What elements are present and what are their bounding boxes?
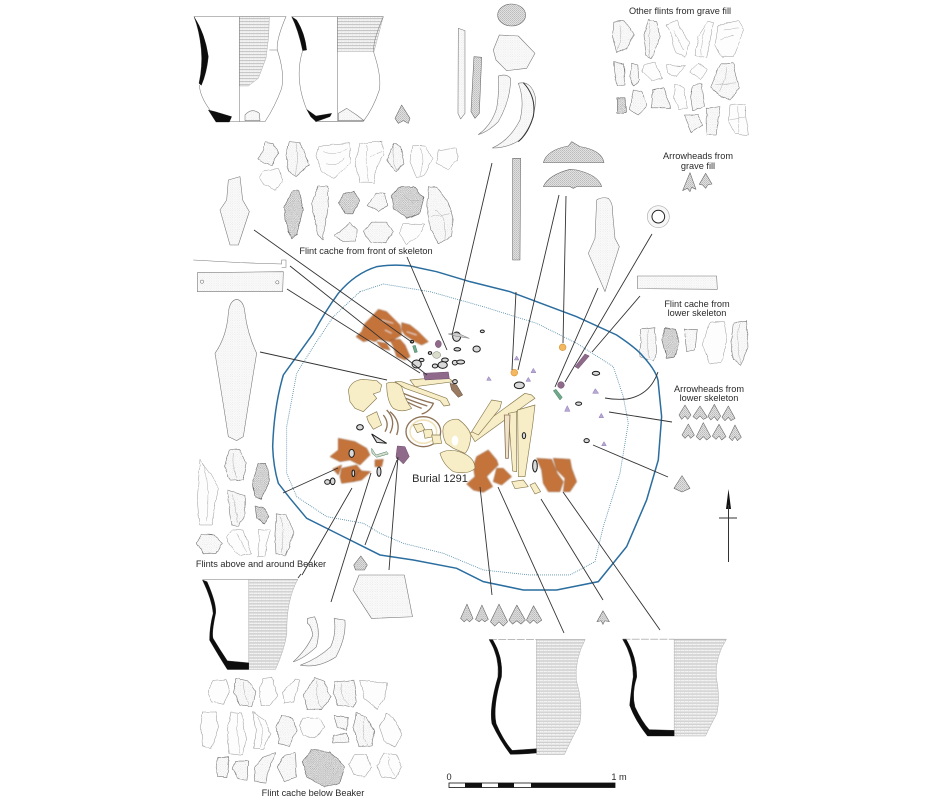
tusks — [478, 75, 536, 148]
other flints from grave fill — [613, 20, 748, 135]
flints above and around Beaker — [197, 449, 294, 557]
lilac arrowheads — [487, 356, 606, 446]
flints, scattered — [325, 330, 600, 485]
knife lower — [543, 169, 602, 188]
beaker 1 — [194, 17, 286, 122]
label: flints above and around Beaker: Flints above and around Beaker — [196, 559, 326, 569]
sherds: left cluster — [330, 438, 383, 483]
green stone pieces — [372, 345, 562, 457]
scale bar: 1 m — [611, 772, 627, 782]
foot bones — [512, 480, 541, 494]
tibia 1 — [518, 405, 535, 477]
stone ball — [498, 4, 526, 26]
pelvis upper — [443, 419, 471, 453]
skull — [348, 379, 382, 412]
arrowhead — [395, 105, 410, 123]
pelvis lower — [440, 450, 475, 473]
flint cache below Beaker — [201, 678, 402, 786]
large dagger — [215, 299, 257, 441]
flint cache from front of skeleton — [257, 142, 457, 244]
arrowhead, lower right — [674, 476, 690, 492]
lower middle beaker — [489, 639, 585, 754]
label: flint cache from front of skeleton: Flint cache from front of skeleton — [299, 246, 433, 256]
upper arm — [395, 382, 450, 406]
top beakers, arrowhead and bone tools — [194, 4, 536, 260]
wrist guard section — [193, 260, 286, 267]
jaw — [367, 412, 382, 429]
label: flint cache below Beaker: Flint cache below Beaker — [262, 788, 364, 798]
purple stone tools — [396, 340, 589, 464]
beaker 2 — [292, 17, 383, 122]
tibia 2 — [508, 412, 517, 472]
label: arrowheads from lower skeleton: lower skeleton — [680, 393, 738, 403]
wrist guard right — [637, 276, 717, 289]
wrist guard — [197, 272, 283, 292]
scale bar — [446, 772, 627, 788]
boar tusks — [293, 617, 345, 666]
long rod — [513, 158, 521, 260]
amber beads — [511, 344, 566, 376]
sherds: right cluster — [537, 458, 577, 492]
grave cut outline — [273, 265, 662, 590]
label: arrowheads from grave fill: Arrowheads from — [663, 151, 733, 161]
small flint above sherd — [354, 556, 367, 570]
pelvis hole — [452, 436, 458, 446]
spine — [413, 423, 442, 444]
sherds: upper cluster — [356, 309, 428, 360]
plano-convex object — [493, 35, 535, 71]
dagger — [588, 198, 619, 292]
ring — [647, 206, 669, 228]
fibula — [504, 415, 510, 458]
label: other flints from grave fill: Other flints from grave fill — [629, 6, 731, 16]
hand bones — [450, 383, 463, 397]
femur 1 — [470, 393, 535, 442]
leader lines — [254, 163, 672, 633]
pottery sherds: Beaker clusters — [330, 309, 577, 492]
skeleton — [348, 377, 541, 494]
forearm — [410, 377, 453, 387]
label: flint cache from lower skeleton: Flint cache from — [664, 299, 730, 309]
left objects: wrist guard, dagger — [193, 260, 286, 441]
sherds: middle cluster — [467, 450, 512, 492]
bone points — [458, 28, 482, 119]
small finds in grave — [325, 330, 606, 485]
flint cache from lower skeleton — [640, 321, 748, 365]
copper and stone objects, upper right — [543, 142, 717, 292]
lower right beaker — [623, 639, 726, 736]
label: flint cache from lower skeleton: lower skeleton — [668, 308, 726, 318]
femur 2 — [472, 400, 502, 435]
arrowheads from grave fill — [683, 173, 712, 192]
ribs and rib cage — [383, 393, 441, 447]
bottom-left beaker — [202, 579, 298, 670]
knife upper — [543, 142, 604, 163]
inner grave line — [287, 284, 628, 575]
arrowheads below burial — [461, 604, 609, 626]
label: arrowheads from lower skeleton: Arrowheads from — [674, 384, 744, 394]
scale bar: 0 — [446, 772, 452, 782]
arrowheads from lower skeleton — [679, 404, 741, 441]
shoulder — [387, 382, 412, 411]
label: Burial 1291: Burial 1291 — [412, 473, 468, 485]
dagger pommel fragment — [220, 177, 249, 245]
decorated sherd — [353, 575, 413, 618]
label: arrowheads from grave fill: grave fill — [681, 161, 715, 171]
north arrow — [719, 489, 737, 562]
